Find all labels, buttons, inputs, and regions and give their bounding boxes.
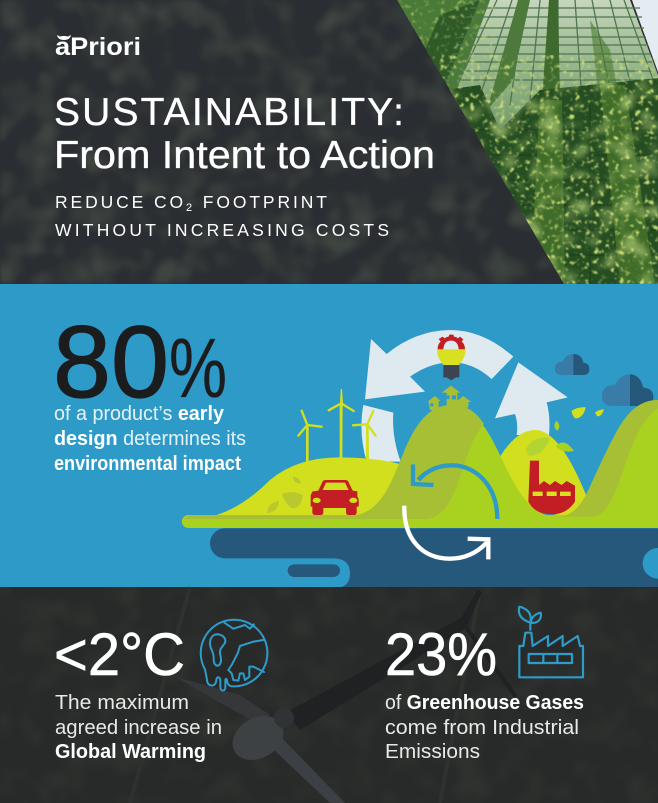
subtitle xyxy=(55,192,389,240)
description: environmental impact xyxy=(54,453,241,475)
stat: temperature xyxy=(54,621,222,763)
icon: red factory xyxy=(528,461,575,514)
stat: emissions: Emissions xyxy=(385,740,480,763)
photo: wind turbine xyxy=(130,587,516,803)
ground strip xyxy=(182,515,658,528)
houses xyxy=(428,386,471,410)
subtitle: REDUCE CO xyxy=(55,192,183,212)
subtitle: WITHOUT INCREASING COSTS xyxy=(55,220,389,240)
mountains xyxy=(393,400,658,515)
panel: bottom stats xyxy=(0,587,658,803)
stat: temperature: Global Warming xyxy=(55,740,206,763)
stat: emissions: of Greenhouse Gases xyxy=(385,691,584,714)
clouds xyxy=(555,354,653,406)
stat: emissions: 23% xyxy=(385,621,497,688)
arrow: blue xyxy=(413,464,497,519)
description: of a product’s early xyxy=(54,403,225,425)
subtitle: 2 xyxy=(186,202,192,214)
light bulb xyxy=(437,335,466,380)
big number: 80 xyxy=(53,305,169,419)
hill factory xyxy=(500,430,587,517)
logo: aPriori xyxy=(55,33,141,61)
icon: red car xyxy=(311,480,359,515)
panel: header xyxy=(0,0,658,284)
stat: temperature: agreed increase in xyxy=(55,716,222,739)
stat: temperature: <2°C xyxy=(54,621,185,688)
panel: 80 percent xyxy=(0,284,658,588)
title: SUSTAINABILITY: xyxy=(54,91,404,134)
water xyxy=(210,528,658,588)
photo: green building xyxy=(397,0,658,284)
subtitle: FOOTPRINT xyxy=(195,192,327,212)
wind turbines xyxy=(298,389,376,462)
big number xyxy=(56,324,225,399)
stat: temperature: The maximum xyxy=(55,691,189,714)
description xyxy=(54,403,246,475)
description: design determines its xyxy=(54,428,246,450)
big number: % xyxy=(169,321,227,415)
hill left xyxy=(217,457,403,517)
leaves xyxy=(267,407,604,513)
stat: emissions xyxy=(385,621,584,763)
title xyxy=(54,91,435,177)
cycle arrows xyxy=(361,330,568,462)
icon: melting globe xyxy=(201,620,267,691)
icon: factory with sprout xyxy=(519,607,583,677)
illustration xyxy=(182,330,658,588)
arrow: white xyxy=(404,506,488,559)
stat: emissions: come from Industrial xyxy=(385,716,579,739)
title: From Intent to Action xyxy=(54,134,435,177)
